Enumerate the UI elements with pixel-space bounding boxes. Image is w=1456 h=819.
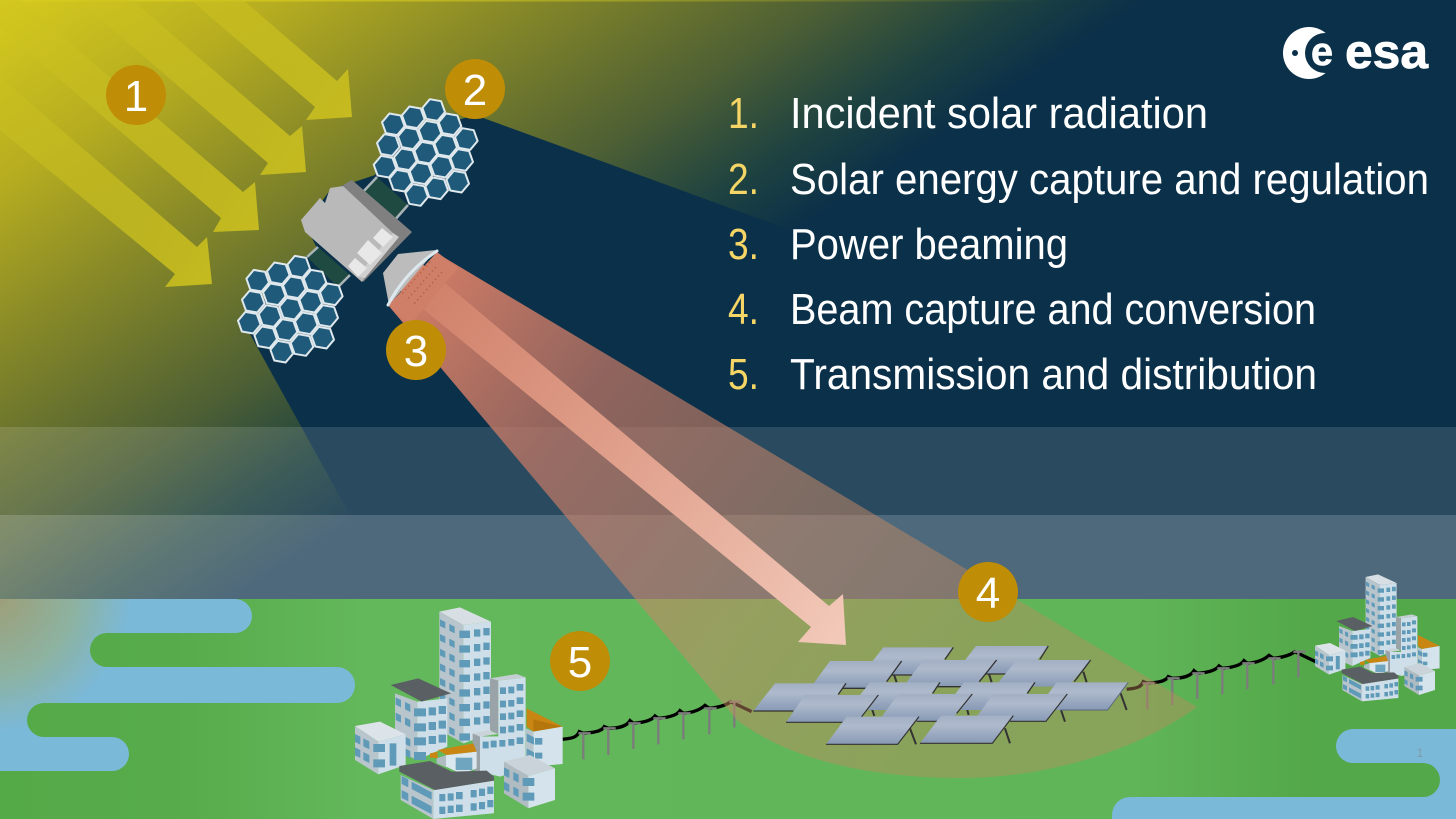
array struts bbox=[307, 177, 408, 287]
badge 2: 2 bbox=[463, 66, 487, 115]
badge 3: 3 bbox=[404, 327, 428, 376]
water right bbox=[1112, 729, 1456, 819]
badge 5: 5 bbox=[568, 638, 592, 687]
power beam arrow bbox=[400, 262, 846, 645]
badge 4 bbox=[958, 562, 1018, 622]
power line right bbox=[1127, 652, 1316, 709]
item 5: 5. bbox=[728, 350, 759, 399]
upper solar array bbox=[374, 99, 478, 206]
esa logo: esa bbox=[1345, 26, 1428, 79]
gaps between body and solar arrays bbox=[307, 177, 408, 287]
sunlit area behind the satellite bbox=[0, 0, 1456, 600]
badge 5 bbox=[550, 631, 610, 691]
item 4: Beam capture and conversion bbox=[790, 285, 1316, 334]
city large bbox=[355, 607, 563, 819]
ground bbox=[0, 599, 1456, 819]
satellite body bbox=[301, 180, 412, 282]
atmosphere band lower bbox=[0, 515, 1456, 600]
ground receiver solar array bbox=[753, 646, 1128, 744]
page number: 1 bbox=[1417, 746, 1424, 760]
numbered list bbox=[728, 89, 1429, 399]
incident solar radiation arrows bbox=[0, 0, 352, 287]
item 4: 4. bbox=[728, 285, 759, 334]
item 3: 3. bbox=[728, 220, 759, 269]
item 1: 1. bbox=[728, 89, 759, 138]
power line left bbox=[563, 702, 752, 759]
item 5: Transmission and distribution bbox=[790, 350, 1317, 399]
badge 1 bbox=[106, 65, 166, 125]
esa logo: e bbox=[1311, 30, 1333, 74]
esa logo bbox=[1283, 26, 1428, 79]
atmosphere band upper bbox=[0, 427, 1456, 515]
badge 4: 4 bbox=[976, 569, 1000, 618]
beam emitter bbox=[383, 250, 458, 325]
satellite bbox=[238, 99, 478, 363]
water left bbox=[0, 599, 355, 771]
item 3: Power beaming bbox=[790, 220, 1068, 269]
badge 2 bbox=[445, 59, 505, 119]
top edge glow bbox=[0, 0, 1050, 2]
item 1: Incident solar radiation bbox=[790, 89, 1208, 138]
city small bbox=[1315, 574, 1440, 701]
badge 1: 1 bbox=[124, 72, 148, 121]
badge 3 bbox=[386, 320, 446, 380]
lower solar array bbox=[238, 256, 343, 363]
item 2: 2. bbox=[728, 155, 759, 204]
microwave beam cone bbox=[388, 255, 1197, 778]
